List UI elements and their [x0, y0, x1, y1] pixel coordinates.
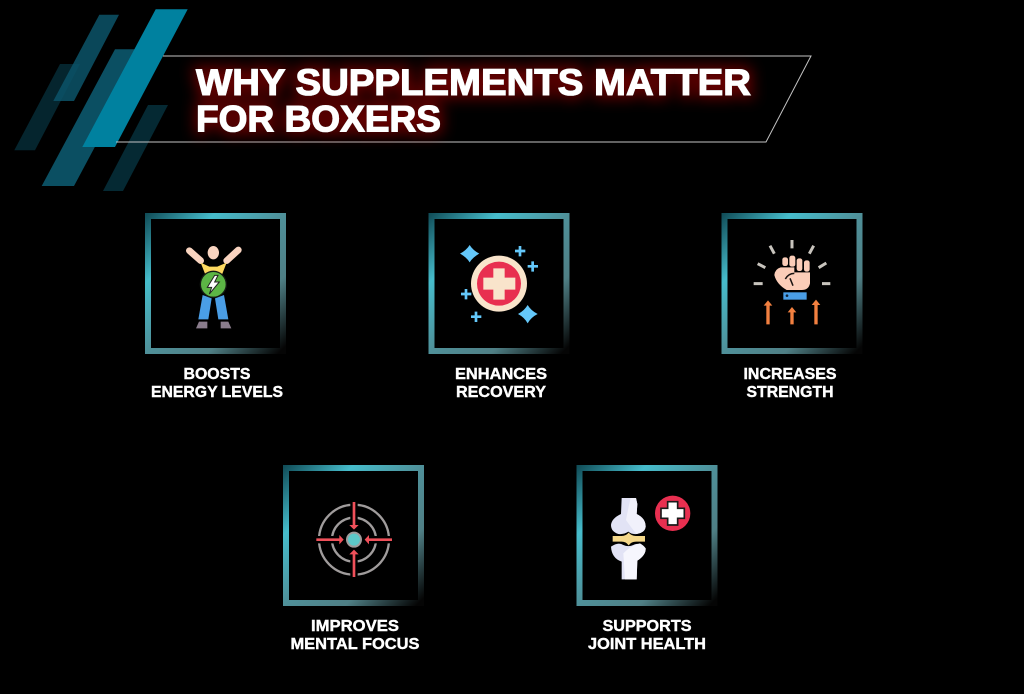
icon: medical cross with sparkles	[460, 245, 538, 323]
card: supports joint health: JOINT HEALTH	[588, 636, 706, 653]
frame	[145, 213, 286, 354]
card: supports joint health	[576, 465, 718, 653]
card: boosts energy levels: ENERGY LEVELS	[151, 384, 283, 401]
icon: fist	[774, 256, 810, 300]
label: ENHANCES	[455, 366, 547, 383]
card: improves mental focus	[283, 465, 424, 653]
icon: person with energy bolt	[189, 246, 238, 328]
frame	[576, 465, 718, 606]
frame	[283, 465, 424, 606]
title	[196, 62, 751, 140]
card: improves mental focus: MENTAL FOCUS	[290, 636, 420, 653]
frame	[428, 213, 570, 354]
label: SUPPORTS	[602, 618, 692, 635]
title: FOR BOXERS	[196, 98, 441, 140]
decorative slanted bars	[14, 9, 188, 191]
icon: rays and arrows	[754, 240, 830, 324]
card: increases strength	[722, 213, 862, 401]
label: INCREASES	[744, 366, 836, 383]
label: BOOSTS	[184, 366, 250, 383]
card: enhances recovery	[428, 213, 570, 401]
title banner outline	[116, 56, 811, 142]
card: enhances recovery: RECOVERY	[456, 384, 547, 401]
card: boosts energy levels	[145, 213, 286, 401]
icon: knee joint with medical cross	[611, 496, 690, 579]
title: WHY SUPPLEMENTS MATTER	[196, 62, 751, 103]
icon: focus target with arrows	[315, 500, 393, 579]
label: IMPROVES	[311, 618, 399, 635]
card: increases strength: STRENGTH	[746, 384, 834, 401]
frame	[722, 213, 862, 354]
